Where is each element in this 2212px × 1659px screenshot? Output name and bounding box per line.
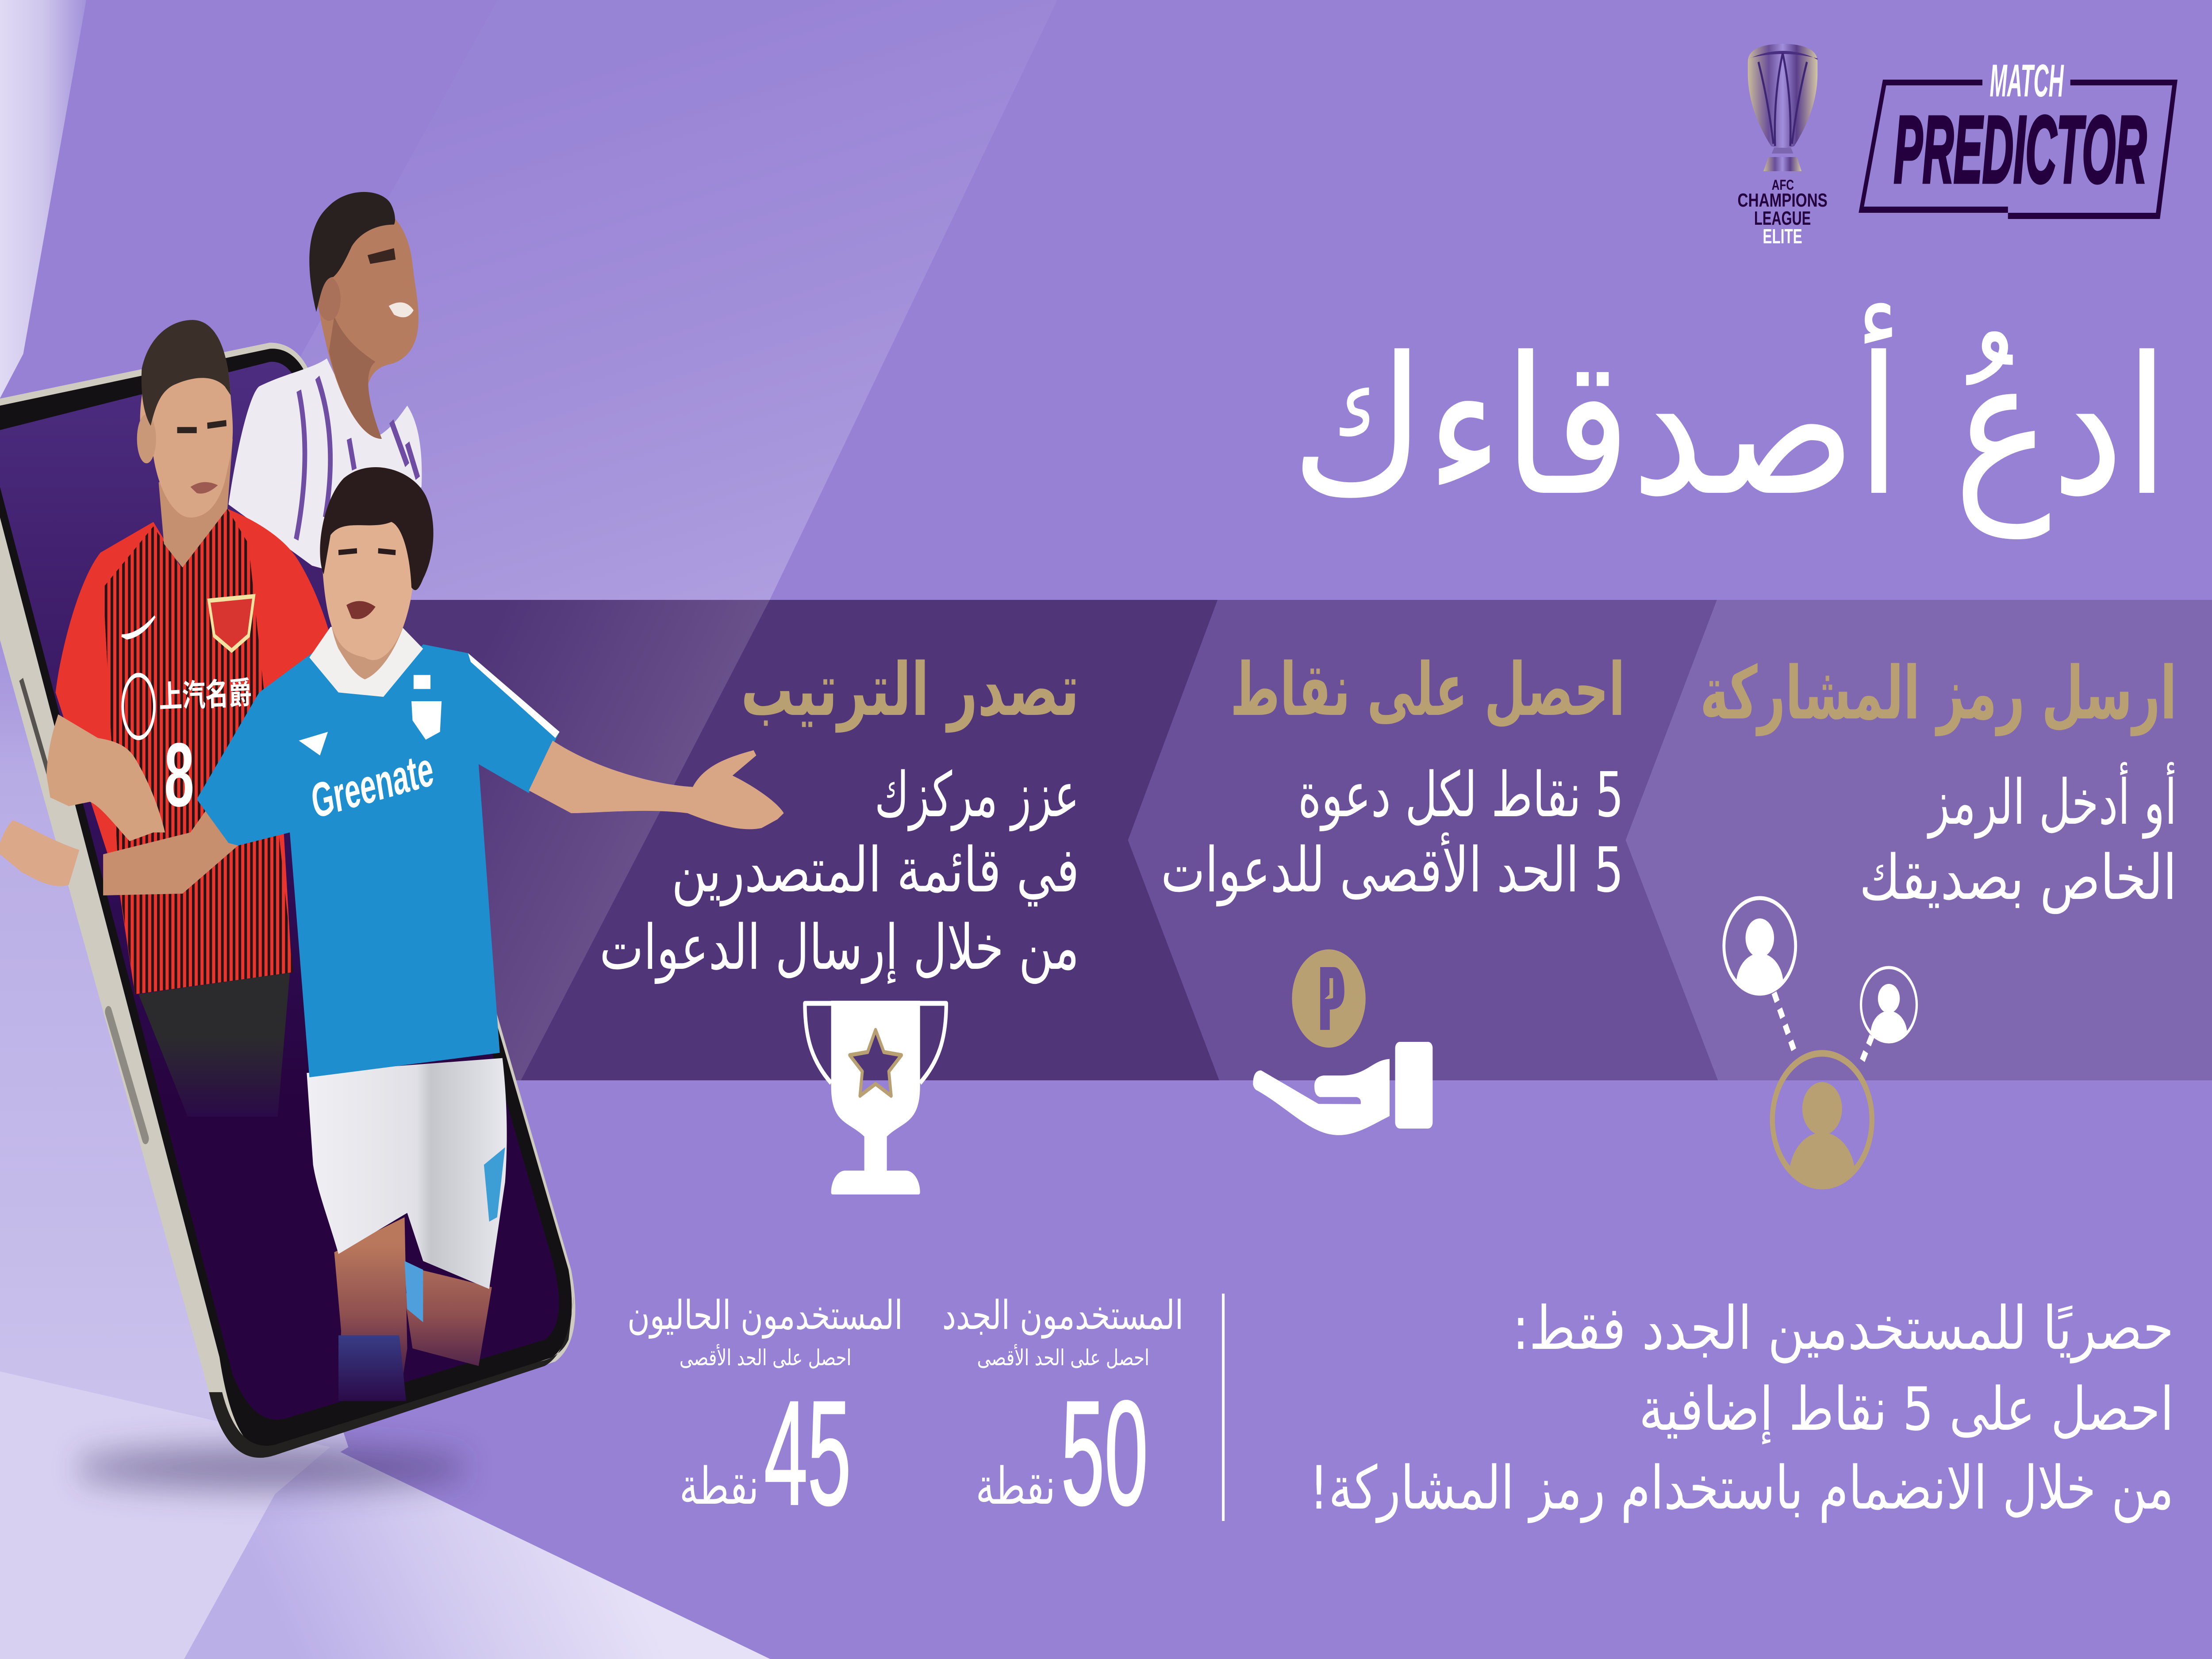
logo: AFC Champions League Elite: AFC <box>1772 177 1794 193</box>
step 2 text: احصل على نقاط <box>1230 648 1625 733</box>
step 1 text: الخاص بصديقك <box>1859 842 2177 914</box>
text: Greenate <box>307 741 437 829</box>
text: 上汽名爵 <box>158 676 252 715</box>
bottom promo text: احصل على 5 نقاط إضافية <box>1639 1375 2174 1444</box>
step 3 text: عزز مركزك <box>875 759 1079 832</box>
bottom promo text: حصريًا للمستخدمين الجدد فقط: <box>1512 1294 2174 1363</box>
text: 8 <box>164 725 194 826</box>
step 2 text: 5 الحد الأقصى للدعوات <box>1161 832 1624 907</box>
logo: AFC Champions League Elite: LEAGUE <box>1754 208 1811 229</box>
step 3 text: في قائمة المتصدرين <box>672 834 1079 907</box>
stat: current users 45 points <box>627 1292 903 1536</box>
stat: current users 45 points: 45 <box>764 1370 851 1536</box>
stat: current users 45 points: المستخدمون الحاليون <box>627 1292 903 1339</box>
stat: current users 45 points: احصل على الحد الأقصى <box>680 1344 851 1371</box>
player: white jersey <box>228 192 422 570</box>
icon: trophy <box>805 1001 946 1194</box>
logo: AFC Champions League Elite: CHAMPIONS <box>1738 190 1828 211</box>
title: ادعُ أصدقاءك <box>1291 303 2170 540</box>
bottom promo text: من خلال الانضمام باستخدام رمز المشاركة! <box>1309 1454 2174 1523</box>
step 1 text <box>1700 651 2177 914</box>
player: blue jersey <box>0 467 784 1401</box>
stat: new users 50 points: نقطة <box>976 1457 1056 1516</box>
stat: new users 50 points: احصل على الحد الأقصى <box>977 1344 1149 1371</box>
panel: step 1 send referral code <box>1626 600 2212 1080</box>
logo: AFC Champions League Elite <box>1738 44 1828 248</box>
icon: invited friends <box>1724 898 1917 1221</box>
stat: new users 50 points <box>942 1292 1183 1536</box>
phone shadow <box>73 1448 471 1488</box>
step 3 text <box>599 648 1079 984</box>
step 2 text: 5 نقاط لكل دعوة <box>1298 759 1624 832</box>
panel: step 3 top the leaderboard <box>398 600 1219 1080</box>
stat: new users 50 points: 50 <box>1061 1370 1148 1536</box>
stat: new users 50 points: المستخدمون الجدد <box>942 1292 1183 1339</box>
step 1 text: أو أدخل الرمز <box>1927 762 2177 839</box>
step 3 text: تصدر الترتيب <box>741 648 1079 733</box>
stat: current users 45 points: نقطة <box>680 1457 759 1516</box>
step 2 text <box>1161 648 1625 907</box>
icon: hand with point coin <box>1253 949 1432 1135</box>
divider line <box>1222 1294 1225 1521</box>
phone <box>0 342 575 1458</box>
bottom promo text <box>1309 1294 2174 1523</box>
logo: Match Predictor: MATCH <box>1990 55 2064 107</box>
player: red jersey <box>46 320 329 1117</box>
panel: step 2 earn points <box>1128 600 1718 1080</box>
logo: Match Predictor <box>1859 55 2177 219</box>
logo: AFC Champions League Elite: ELITE <box>1763 225 1802 248</box>
step 3 text: من خلال إرسال الدعوات <box>599 912 1079 984</box>
